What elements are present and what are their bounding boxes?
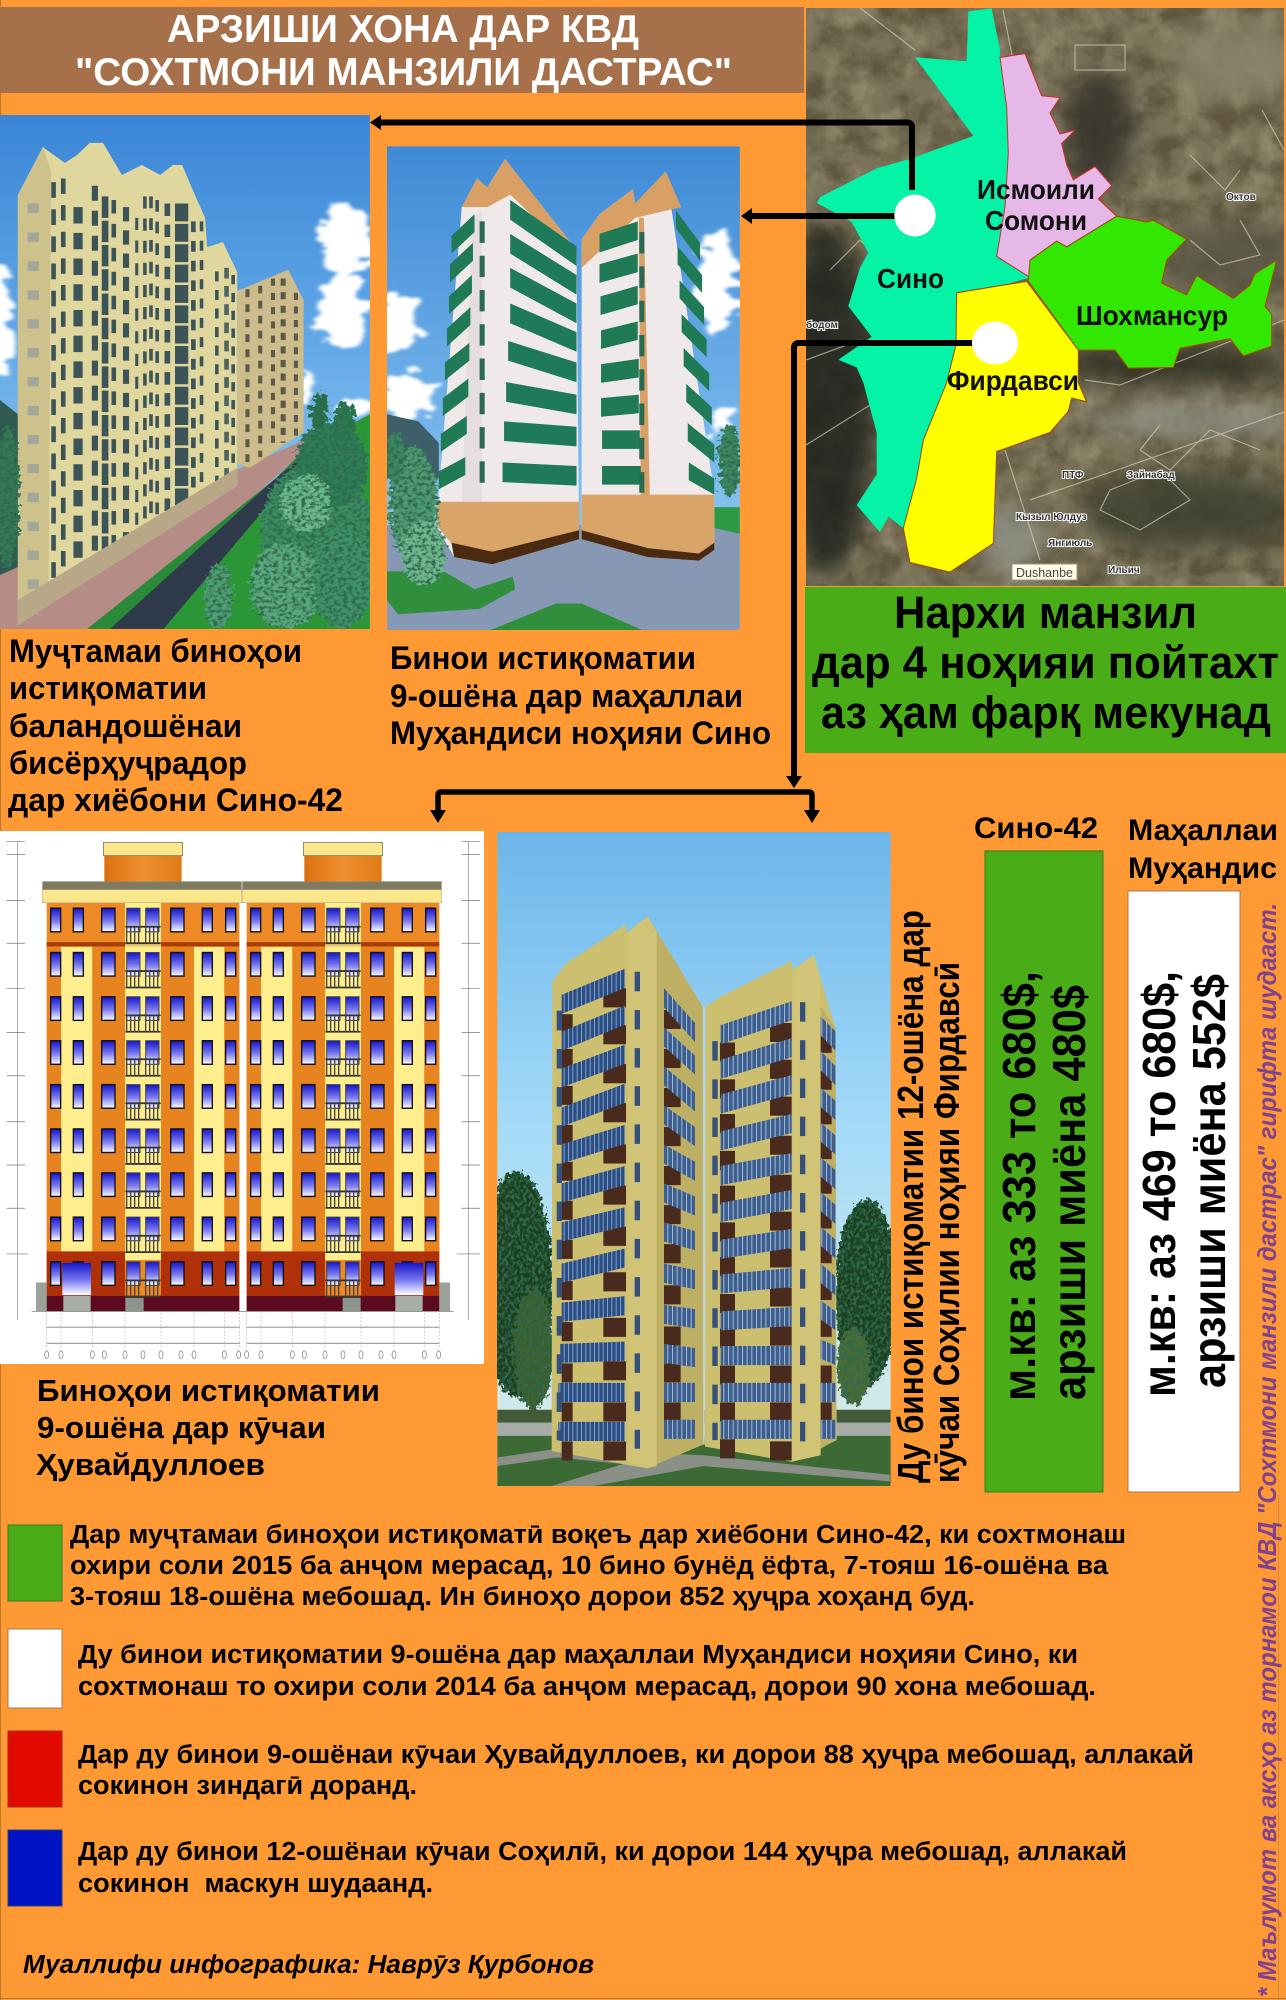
price bar: Sino-42: арзиши миёна 480$ bbox=[1043, 985, 1095, 1400]
price heading: Muhandis: Муҳандис bbox=[1128, 852, 1277, 885]
legend: white item bbox=[8, 1629, 1096, 1708]
small place names on map: Октов bbox=[1226, 192, 1256, 203]
price bar: Muhandis: арзиши миёна 552$ bbox=[1183, 974, 1235, 1388]
map marker: Firdavsi bbox=[972, 322, 1018, 364]
district labels bbox=[877, 174, 1228, 396]
caption: Huvaydulloev buildings bbox=[36, 1373, 380, 1482]
small place names on map: Янгиюль bbox=[1048, 538, 1092, 549]
caption: Sohili towers (vertical) bbox=[890, 910, 967, 1483]
caption: Sino-42 complex: бисёрҳуҷрадор bbox=[9, 745, 247, 781]
district shapes bbox=[817, 8, 1277, 572]
legend: green item bbox=[8, 1521, 1126, 1611]
caption: Sino-42 complex: истиқоматии bbox=[9, 670, 207, 706]
legend: white item: сохтмонаш то охири соли 2014 ба анҷом мерасад, дорои 90 хона мебошад. bbox=[78, 1673, 1096, 1701]
small place names on map: Зайнабад bbox=[1127, 469, 1175, 481]
caption: Huvaydulloev buildings: Биноҳои истиқоматии bbox=[37, 1373, 380, 1408]
legend: blue item: Дар ду бинои 12-ошёнаи кӯчаи Соҳилӣ, ки дорои 144 ҳуҷра мебошад, аллакай bbox=[78, 1838, 1127, 1866]
photo: Sino-42 residential complex bbox=[0, 115, 372, 629]
caption: Sino-42 complex: Муҷтамаи биноҳои bbox=[9, 633, 302, 669]
small place names on map: ПТФ bbox=[1062, 470, 1084, 481]
title banner bbox=[0, 7, 804, 94]
satellite background bbox=[775, 8, 1286, 586]
arrow: Sino marker to Sino-42 photo bbox=[370, 115, 912, 190]
legend: green item: 3-тояш 18-ошёна мебошад. Ин биноҳо дорои 852 ҳуҷра хоҳанд буд. bbox=[70, 1583, 975, 1611]
price bar: Sino-42: м.кв: аз 333 то 680$, bbox=[993, 971, 1045, 1401]
price bar: Muhandis: м.кв: аз 469 то 680$, bbox=[1133, 971, 1185, 1397]
district labels: Исмоили bbox=[977, 174, 1095, 205]
legend: white item: Ду бинои истиқоматии 9-ошёна дар маҳаллаи Муҳандиси ноҳияи Сино, ки bbox=[78, 1641, 1078, 1669]
green callout: price differs bbox=[805, 587, 1286, 753]
price heading: Muhandis bbox=[1128, 814, 1278, 885]
source note (vertical): * Маълумот ва аксҳо аз торнамои КВД "Сохтмони манзили дастрас" гирифта шудааст. bbox=[1252, 903, 1282, 1997]
legend: blue item bbox=[8, 1830, 1127, 1906]
author credit: Муаллифи инфографика: Наврӯз Қурбонов bbox=[23, 1951, 594, 1979]
legend: green item: охири соли 2015 ба анҷом мерасад, 10 бино бунёд ёфта, 7-тояш 16-ошёна ва bbox=[70, 1552, 1109, 1580]
district labels: Сомони bbox=[985, 205, 1087, 236]
legend: red item bbox=[8, 1731, 1194, 1807]
district labels: Сино bbox=[877, 263, 944, 294]
legend: green item: Дар муҷтамаи биноҳои истиқоматӣ воқеъ дар хиёбони Сино-42, ки сохтмонаш bbox=[70, 1521, 1126, 1549]
caption: Sino-42 complex: дар хиёбони Сино-42 bbox=[8, 782, 343, 818]
arrow: Firdavsi marker down to lower photos bbox=[786, 343, 973, 788]
caption: Muhandis building: Бинои истиқоматии bbox=[390, 640, 696, 676]
title banner: АРЗИШИ ХОНА ДАР КВД bbox=[167, 8, 639, 51]
caption: Muhandis building bbox=[390, 640, 771, 751]
small place names on map bbox=[806, 192, 1256, 576]
photo: 9-storey buildings in Muhandis bbox=[378, 146, 741, 630]
map marker: Sino bbox=[894, 194, 936, 236]
district: Ismoili Somoni bbox=[997, 54, 1117, 277]
arrow: Sino marker to Muhandis photo bbox=[741, 208, 895, 224]
price heading: Sino-42: Сино-42 bbox=[974, 812, 1098, 845]
caption: Sino-42 complex bbox=[8, 633, 343, 818]
caption: Huvaydulloev buildings: 9-ошёна дар кӯчаи bbox=[37, 1410, 326, 1445]
photo: architectural elevation on Huvaydulloev street bbox=[0, 831, 484, 1364]
green callout: price differs: дар 4 ноҳияи пойтахт bbox=[812, 637, 1279, 688]
small place names on map: Кызыл Юлдуз bbox=[1016, 512, 1087, 523]
legend: red item: сокинон зиндагӣ доранд. bbox=[78, 1772, 417, 1800]
district labels: Фирдавси bbox=[947, 365, 1079, 396]
title banner: "СОХТМОНИ МАНЗИЛИ ДАСТРАС" bbox=[75, 51, 732, 94]
photo: 12-storey twin towers on Sohili street bbox=[480, 832, 898, 1487]
legend: blue item: сокинон маскун шудаанд. bbox=[78, 1870, 433, 1898]
district: Sino bbox=[817, 8, 1030, 532]
Dushanbe label: Dushanbe bbox=[1016, 565, 1073, 580]
green callout: price differs: Нархи манзил bbox=[894, 587, 1197, 638]
caption: Muhandis building: 9-ошёна дар маҳаллаи bbox=[390, 678, 743, 714]
green callout: price differs: аз ҳам фарқ мекунад bbox=[821, 687, 1271, 738]
caption: Sino-42 complex: баландошёнаи bbox=[9, 708, 242, 744]
caption: Huvaydulloev buildings: Ҳувайдуллоев bbox=[36, 1447, 265, 1482]
legend: red item: Дар ду бинои 9-ошёнаи кӯчаи Ҳувайдуллоев, ки дорои 88 ҳуҷра мебошад, аллакай bbox=[78, 1741, 1194, 1769]
small place names on map: бодом bbox=[806, 319, 838, 331]
price bar: Sino-42 bbox=[985, 851, 1103, 1492]
district labels: Шохмансур bbox=[1076, 300, 1228, 331]
district: Shohmansur bbox=[1028, 216, 1277, 368]
price heading: Muhandis: Маҳаллаи bbox=[1128, 814, 1278, 847]
small place names on map: Ильич bbox=[1108, 565, 1140, 576]
district: Firdavsi bbox=[903, 281, 1087, 572]
price bar: Muhandis bbox=[1128, 891, 1240, 1492]
caption: Sohili towers (vertical): кӯчаи Соҳилии ноҳияи Фирдавсӣ bbox=[926, 962, 967, 1483]
caption: Muhandis building: Муҳандиси ноҳияи Сино bbox=[390, 715, 771, 751]
map of Dushanbe districts bbox=[775, 8, 1286, 586]
arrow: split to lower photos bbox=[430, 792, 820, 823]
caption: Sohili towers (vertical): Ду бинои истиқоматии 12-ошёна дар bbox=[890, 910, 931, 1483]
